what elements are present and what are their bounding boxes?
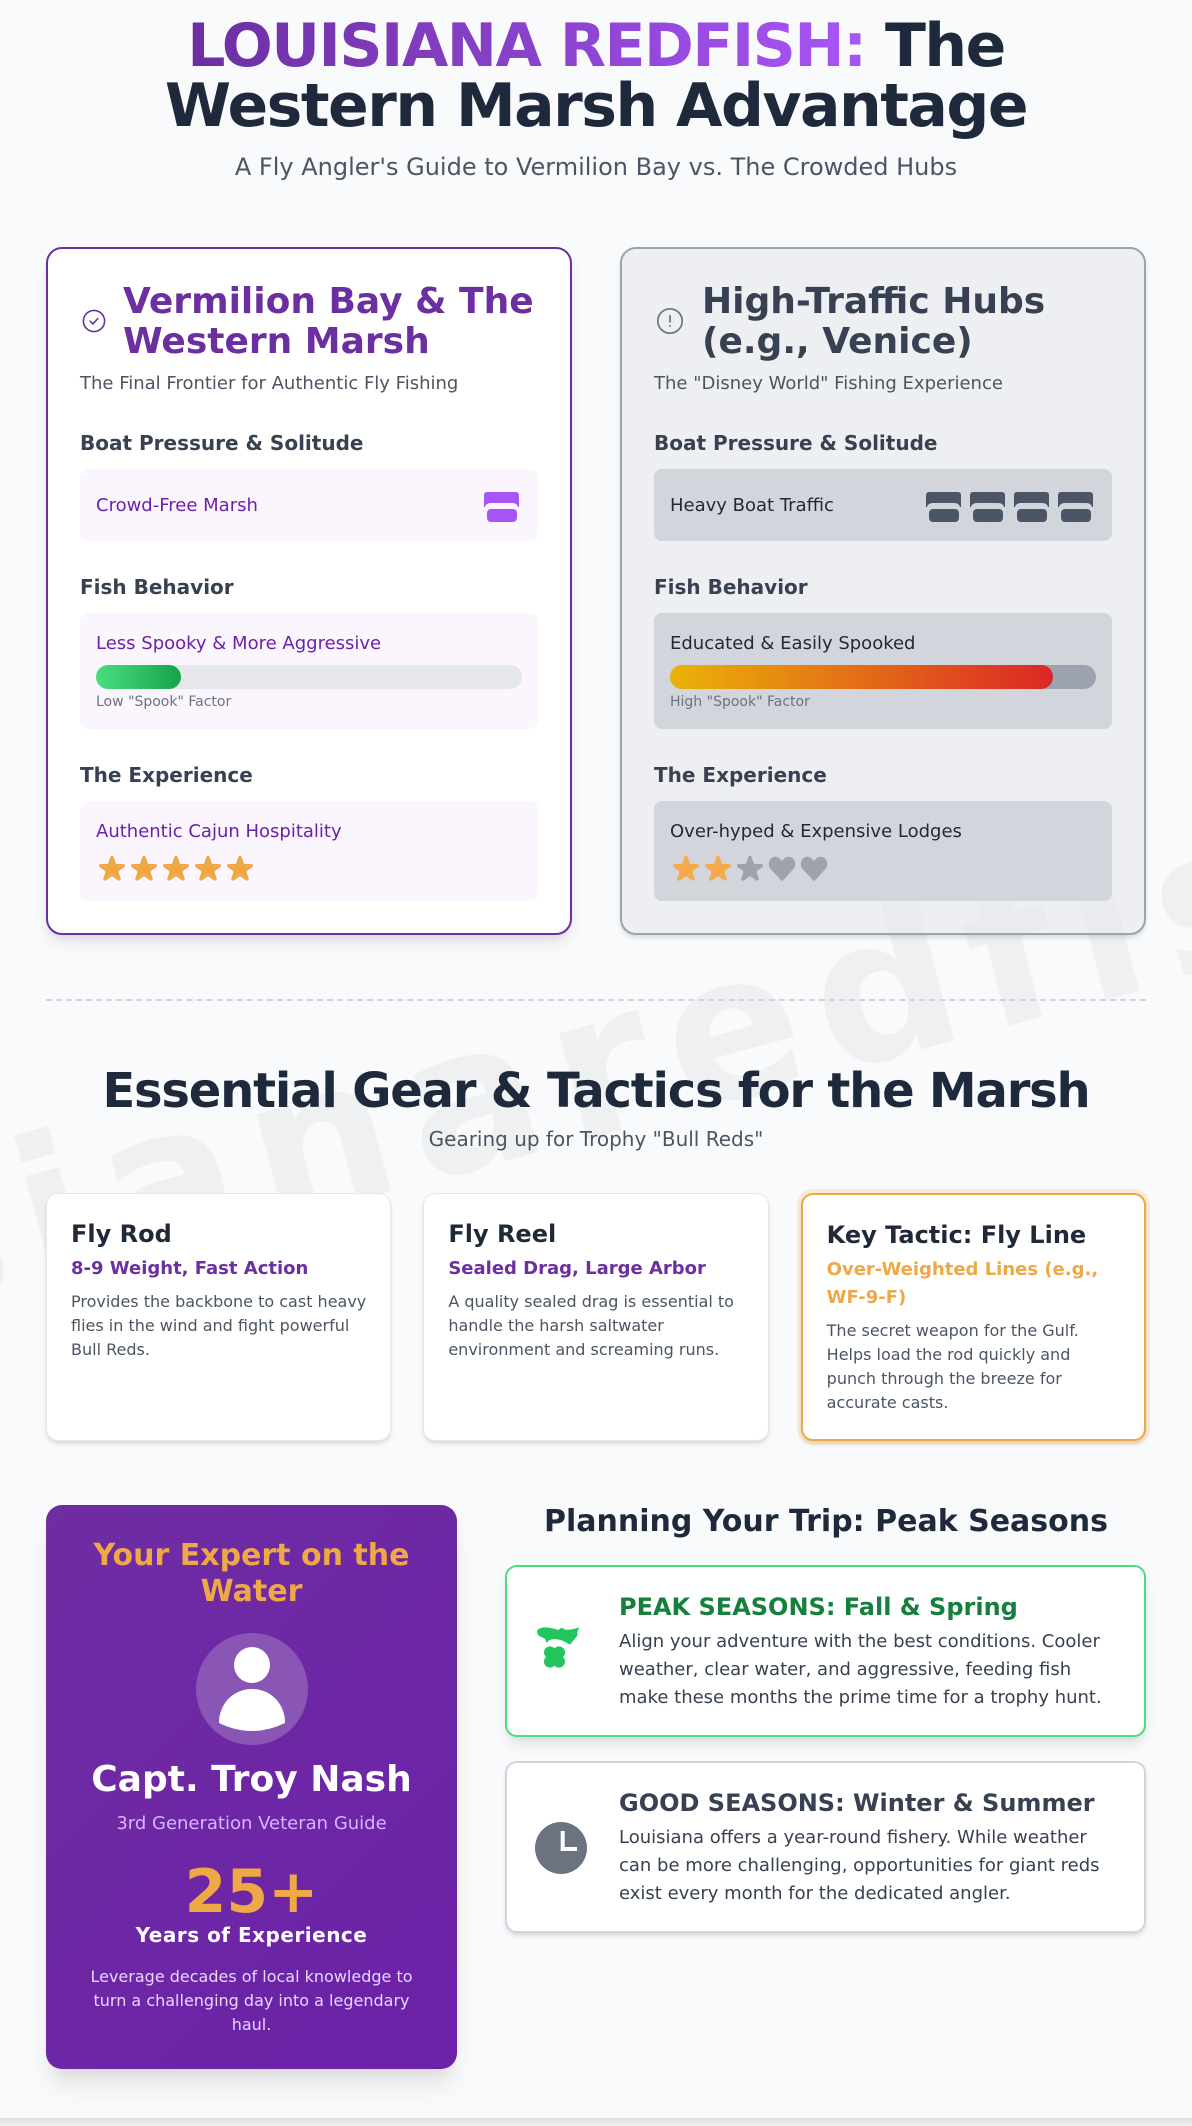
label: boat pressure: Boat Pressure & Solitude xyxy=(654,431,937,455)
card tagline: 8-9 Weight, Fast Action xyxy=(71,1258,308,1279)
season text xyxy=(619,1631,1102,1708)
panel heading xyxy=(702,281,1045,362)
section subheading: Gearing up for Trophy "Bull Reds" xyxy=(429,1127,763,1151)
bar caption: High "Spook" Factor xyxy=(670,694,810,710)
metric: heavy boat traffic xyxy=(654,469,1112,541)
season text xyxy=(619,1827,1100,1904)
card text: flies in the wind and fight powerful xyxy=(71,1316,349,1335)
metric text: Over-hyped & Expensive Lodges xyxy=(670,821,962,842)
bar caption: Low "Spook" Factor xyxy=(96,694,231,710)
card title: Fly Reel xyxy=(448,1220,556,1248)
gear card: fly reel xyxy=(423,1193,769,1441)
title: LOUISIANA REDFISH: The xyxy=(187,11,1005,81)
card text: Provides the backbone to cast heavy xyxy=(71,1292,366,1311)
expert text: Leverage decades of local knowledge to xyxy=(90,1967,413,1986)
label: the experience: The Experience xyxy=(654,763,827,787)
metric: high spook factor xyxy=(654,613,1112,729)
title: Western Marsh Advantage xyxy=(165,71,1027,141)
season card: peak seasons xyxy=(505,1565,1146,1737)
card text xyxy=(448,1292,734,1359)
section heading: gear and tactics: Essential Gear & Tactics for the Marsh xyxy=(102,1063,1090,1119)
icon: leaf and clover xyxy=(537,1627,580,1668)
panel subheading: The Final Frontier for Authentic Fly Fishing xyxy=(80,373,458,394)
panel: expert guide xyxy=(46,1505,457,2068)
card text: A quality sealed drag is essential to xyxy=(448,1292,734,1311)
season card: good seasons xyxy=(505,1761,1146,1933)
metric text: Authentic Cajun Hospitality xyxy=(96,821,342,842)
metric: over-hyped lodges xyxy=(654,801,1112,901)
expert text: haul. xyxy=(232,2015,271,2034)
bar: spook factor 90 percent xyxy=(670,665,1096,689)
label: fish behavior: Fish Behavior xyxy=(80,575,234,599)
stat: years: 25+ xyxy=(185,1857,318,1927)
guide name: Capt. Troy Nash xyxy=(91,1758,412,1800)
stat label: Years of Experience xyxy=(136,1923,367,1947)
card title: Fly Rod xyxy=(71,1220,172,1248)
expert text xyxy=(90,1967,413,2034)
icon: guide avatar xyxy=(196,1633,308,1745)
rating: five stars xyxy=(99,856,253,881)
season text: make these months the prime time for a trophy hunt. xyxy=(619,1687,1102,1708)
season text: Louisiana offers a year-round fishery. While weather xyxy=(619,1827,1087,1848)
panel subheading: The "Disney World" Fishing Experience xyxy=(654,373,1003,394)
metric: authentic hospitality xyxy=(80,801,538,901)
card text: Bull Reds. xyxy=(71,1340,150,1359)
card title: Key Tactic: Fly Line xyxy=(827,1221,1086,1249)
panel heading: High-Traffic Hubs xyxy=(702,281,1045,322)
season text: exist every month for the dedicated angler. xyxy=(619,1883,1011,1904)
panel heading: Vermilion Bay & The xyxy=(123,281,534,322)
card text xyxy=(71,1292,366,1359)
metric: crowd-free marsh xyxy=(80,469,538,541)
icon: clock xyxy=(535,1822,587,1874)
season text: weather, clear water, and aggressive, feeding fish xyxy=(619,1659,1071,1680)
card tagline: Sealed Drag, Large Arbor xyxy=(448,1258,706,1279)
card tagline: Over-Weighted Lines (e.g., xyxy=(827,1259,1098,1280)
expert text: turn a challenging day into a legendary xyxy=(93,1991,410,2010)
expert heading xyxy=(93,1538,409,1609)
panel: High-Traffic Hubs xyxy=(620,247,1146,935)
card text: The secret weapon for the Gulf. xyxy=(827,1321,1079,1340)
heading: planning your trip: Planning Your Trip: Peak Seasons xyxy=(544,1504,1108,1539)
metric text: Crowd-Free Marsh xyxy=(96,495,258,516)
metric: low spook factor xyxy=(80,613,538,729)
subtitle: A Fly Angler's Guide to Vermilion Bay vs. The Crowded Hubs xyxy=(235,153,957,181)
panel: Vermilion Bay and the Western Marsh xyxy=(46,247,572,935)
expert heading: Your Expert on the xyxy=(94,1538,409,1573)
season text: can be more challenging, opportunities for giant reds xyxy=(619,1855,1100,1876)
icon: boat xyxy=(484,492,519,522)
card text: environment and screaming runs. xyxy=(448,1340,719,1359)
card text: Helps load the rod quickly and xyxy=(827,1345,1070,1364)
panel heading xyxy=(123,281,534,362)
card tagline xyxy=(827,1259,1098,1308)
icon: check circle xyxy=(82,310,106,332)
label: the experience: The Experience xyxy=(80,763,253,787)
card text: accurate casts. xyxy=(827,1393,948,1412)
metric text: Heavy Boat Traffic xyxy=(670,495,834,516)
card tagline: WF-9-F) xyxy=(827,1287,906,1308)
icon: four boats xyxy=(926,492,1093,522)
gear card: fly rod xyxy=(46,1193,391,1441)
title xyxy=(165,11,1027,141)
label: fish behavior: Fish Behavior xyxy=(654,575,808,599)
guide title: 3rd Generation Veteran Guide xyxy=(116,1813,387,1834)
label: boat pressure: Boat Pressure & Solitude xyxy=(80,431,363,455)
season title: GOOD SEASONS: Winter & Summer xyxy=(619,1789,1095,1817)
rating: two of five xyxy=(673,856,828,882)
card text: handle the harsh saltwater xyxy=(448,1316,664,1335)
icon: warning circle xyxy=(657,308,683,334)
expert heading: Water xyxy=(201,1574,302,1609)
panel heading: Western Marsh xyxy=(123,321,430,362)
card text: punch through the breeze for xyxy=(827,1369,1062,1388)
card text xyxy=(826,1321,1079,1412)
metric text: Educated & Easily Spooked xyxy=(670,633,916,654)
gear card: key tactic fly line xyxy=(801,1193,1146,1441)
bar: spook factor 20 percent xyxy=(96,665,522,689)
season title: PEAK SEASONS: Fall & Spring xyxy=(619,1593,1018,1621)
season text: Align your adventure with the best conditions. Cooler xyxy=(619,1631,1100,1652)
metric text: Less Spooky & More Aggressive xyxy=(96,633,381,654)
panel heading: (e.g., Venice) xyxy=(702,321,973,362)
